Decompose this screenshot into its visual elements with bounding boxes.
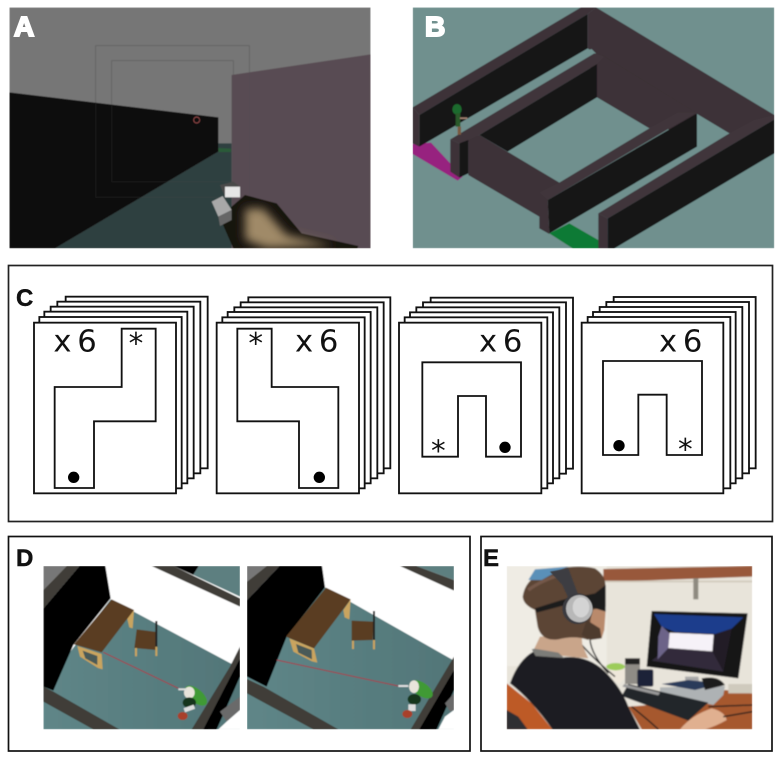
stack 4: * — [678, 432, 693, 466]
stack 1: x 6 — [53, 325, 95, 360]
right mauve wall — [232, 54, 371, 248]
monitor — [647, 611, 748, 678]
panel E: participant photo — [481, 536, 772, 751]
table — [74, 599, 134, 669]
hair — [523, 567, 606, 640]
chair — [134, 621, 157, 656]
beard — [582, 620, 602, 640]
label B: B — [425, 11, 445, 42]
avatar — [398, 677, 436, 718]
photo — [507, 566, 752, 729]
wall — [507, 566, 752, 729]
stack 2: * — [248, 326, 263, 360]
start zone magenta — [413, 143, 463, 181]
cup and mugs — [608, 668, 625, 684]
VR headset — [535, 585, 606, 613]
stack 3: * — [431, 434, 446, 468]
avatar — [177, 685, 208, 721]
headphones — [550, 568, 593, 624]
pointer ray — [277, 660, 398, 686]
chair — [352, 611, 375, 649]
label E: E — [483, 545, 499, 572]
left black wall — [9, 92, 218, 248]
desk — [628, 690, 752, 729]
label A: A — [14, 11, 34, 42]
panel D: pointing task screenshots — [8, 536, 470, 751]
stack 1: * — [129, 326, 143, 360]
stack 4 — [582, 297, 756, 493]
pointer ray — [103, 652, 178, 688]
right screenshot — [247, 566, 454, 729]
shirt — [510, 652, 640, 729]
panel A: first-person view — [9, 7, 371, 248]
stack 2 — [217, 297, 390, 493]
panel B: overhead maze view — [413, 7, 774, 248]
stack 3: x 6 — [479, 325, 521, 360]
cables — [582, 640, 752, 729]
table — [286, 588, 351, 663]
goal zone green — [549, 223, 599, 248]
panel C: maze layouts — [8, 266, 772, 522]
hand — [680, 708, 727, 729]
stack 1 — [34, 297, 208, 493]
face — [588, 607, 606, 638]
label C: C — [16, 285, 33, 312]
stack 4: x 6 — [659, 325, 701, 360]
virtual hand — [212, 182, 358, 248]
stack 3 — [399, 298, 573, 493]
laptop base / books — [660, 686, 725, 705]
avatar — [452, 104, 467, 135]
inner maze wall — [450, 49, 697, 234]
stack 2: x 6 — [295, 325, 337, 360]
label D: D — [16, 545, 33, 572]
keyboard — [622, 684, 708, 721]
left screenshot — [43, 566, 240, 729]
chair — [507, 683, 552, 729]
outer maze wall — [413, 7, 774, 248]
shelf — [603, 566, 752, 582]
neck — [533, 636, 588, 658]
